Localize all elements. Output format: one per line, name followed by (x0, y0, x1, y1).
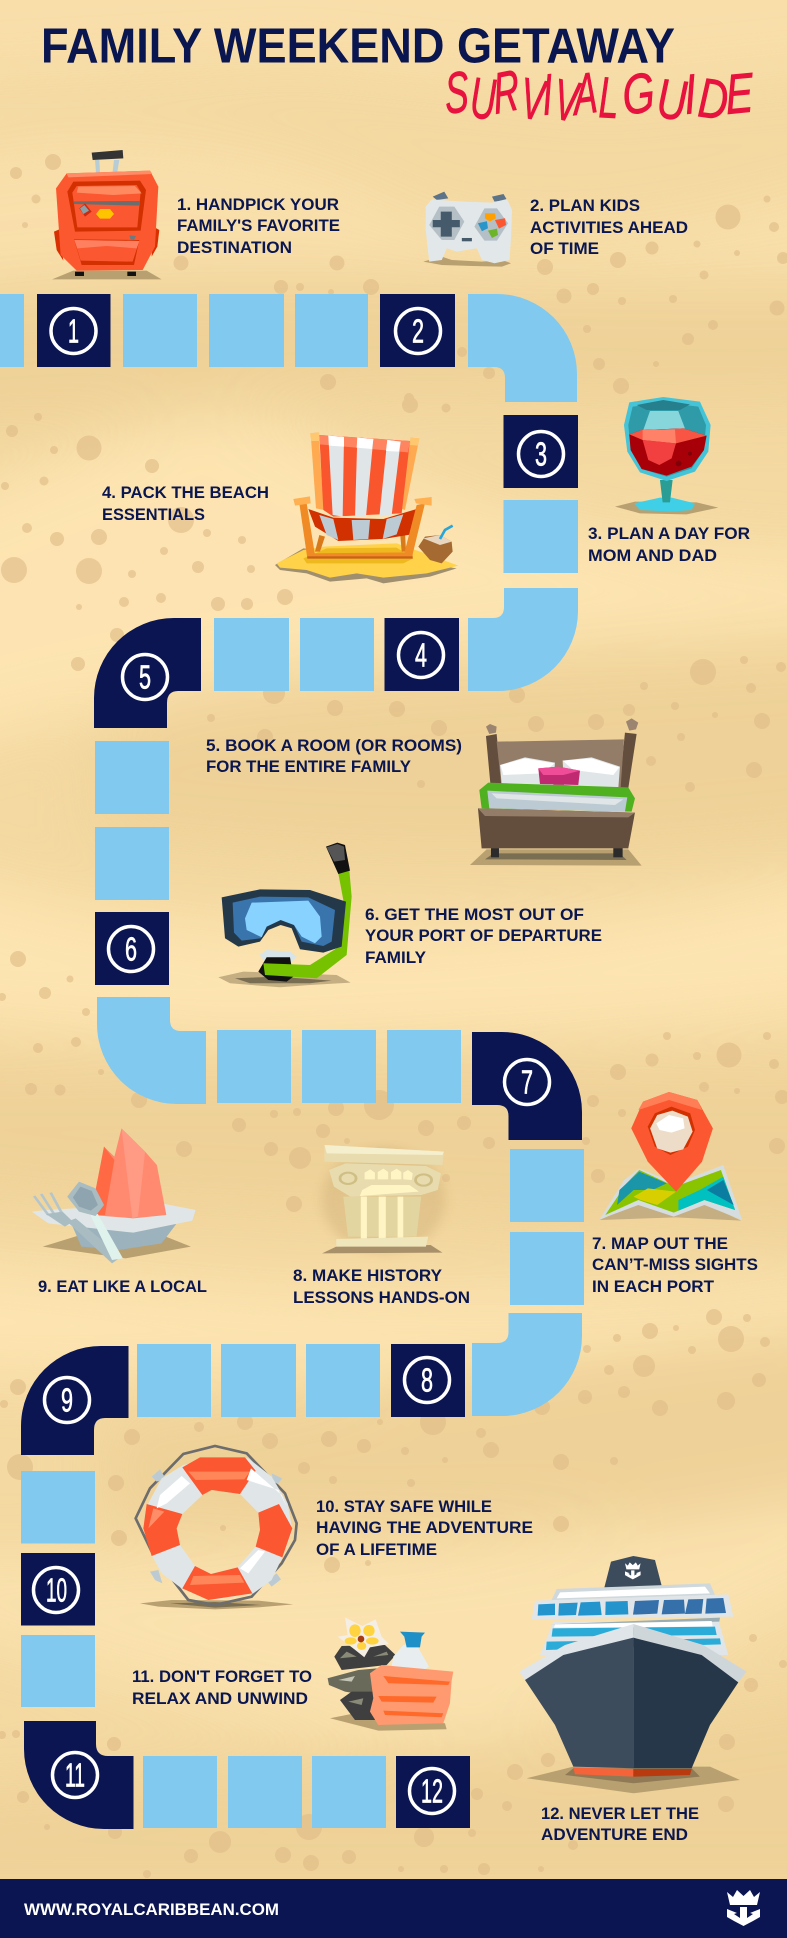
icon: snorkel mask (218, 843, 352, 987)
step 5 text (206, 736, 462, 776)
icon: food plate with cutlery (32, 1128, 196, 1263)
step 2 text: 2. PLAN KIDS (530, 196, 640, 215)
icon: cruise ship (519, 1556, 747, 1793)
step 4 text: ESSENTIALS (102, 505, 205, 524)
step 2 tile: 2 (412, 312, 424, 350)
step 1 text: 1. HANDPICK YOUR (177, 195, 339, 214)
step 8 tile (391, 1344, 465, 1417)
icon: greek column (322, 1145, 445, 1253)
step 7 corner tile: 7 (521, 1064, 533, 1100)
step 4 tile: 4 (415, 636, 427, 674)
corner tile (468, 294, 577, 402)
path tile (510, 1149, 584, 1222)
step 12 text: 12. NEVER LET THE (541, 1804, 699, 1823)
path tile (302, 1030, 376, 1103)
icon: spa stones and towels (328, 1617, 453, 1731)
corner tile (97, 997, 206, 1104)
icon: life ring (136, 1446, 297, 1609)
step 8 tile: 8 (421, 1362, 433, 1398)
step 11 text (132, 1667, 312, 1708)
step 4 text: 4. PACK THE BEACH (102, 483, 269, 502)
step 2 text (530, 196, 688, 258)
path tile (504, 500, 578, 573)
step 12 tile (396, 1756, 470, 1828)
step 2 tile (380, 294, 455, 367)
subtitle: survival guide (441, 59, 755, 134)
step 4 text (102, 483, 269, 524)
step 1 text: FAMILY'S FAVORITE (177, 216, 340, 235)
step 7 text: IN EACH PORT (592, 1277, 715, 1296)
step 10 tile (21, 1553, 95, 1626)
path tile (387, 1030, 461, 1103)
step 10 tile: 10 (46, 1572, 67, 1608)
path tile (312, 1756, 386, 1828)
step 8 text: 8. MAKE HISTORY (293, 1266, 443, 1285)
corner tile (472, 1313, 582, 1416)
path tile (221, 1344, 296, 1417)
game board path (0, 294, 584, 1829)
step 8 text: LESSONS HANDS-ON (293, 1288, 470, 1307)
step 9 text: 9. EAT LIKE A LOCAL (38, 1277, 207, 1296)
step 6 text: 6. GET THE MOST OUT OF (365, 905, 584, 924)
step 5 text: 5. BOOK A ROOM (OR ROOMS) (206, 736, 462, 755)
path tile (143, 1756, 217, 1828)
path tile (123, 294, 197, 367)
path tile (0, 294, 24, 367)
step 3 tile (504, 415, 578, 488)
icon: suitcase (52, 150, 162, 279)
path tile (300, 618, 374, 691)
step 11 corner tile: 11 (65, 1756, 85, 1794)
step 2 text: OF TIME (530, 239, 599, 258)
path tile (209, 294, 284, 367)
step 8 text (293, 1266, 470, 1307)
step 6 tile (95, 912, 169, 985)
step 7 corner tile (472, 1032, 582, 1140)
step 7 text: CAN’T-MISS SIGHTS (592, 1255, 758, 1274)
path tile (21, 1635, 95, 1707)
step 1 text (177, 195, 340, 257)
step 6 text: FAMILY (365, 948, 427, 967)
step 1 tile: 1 (68, 312, 79, 350)
step 10 text: HAVING THE ADVENTURE (316, 1518, 533, 1537)
path tile (306, 1344, 380, 1417)
step 3 text (588, 524, 750, 565)
step 10 text (316, 1497, 533, 1559)
step 10 text: OF A LIFETIME (316, 1540, 437, 1559)
step 1 tile (37, 294, 110, 367)
step 4 tile (384, 618, 459, 691)
footer bar (0, 1879, 787, 1938)
step 9 corner tile (21, 1346, 128, 1455)
icon: crown and anchor logo (727, 1890, 760, 1926)
step 11 corner tile (24, 1721, 134, 1829)
icon: beach chair (275, 432, 458, 583)
step 11 text: RELAX AND UNWIND (132, 1689, 308, 1708)
title: FAMILY WEEKEND GETAWAY (41, 20, 675, 74)
icon: bed (470, 718, 642, 866)
path tile (21, 1471, 95, 1544)
step 12 tile: 12 (421, 1772, 443, 1810)
path tile (214, 618, 289, 691)
step 1 text: DESTINATION (177, 238, 292, 257)
step 9 corner tile: 9 (61, 1382, 73, 1418)
step 12 text: ADVENTURE END (541, 1825, 688, 1844)
step 5 corner tile: 5 (139, 658, 151, 696)
path tile (217, 1030, 291, 1103)
step 6 tile: 6 (125, 930, 137, 968)
step 5 text: FOR THE ENTIRE FAMILY (206, 757, 412, 776)
footer url: WWW.ROYALCARIBBEAN.COM (24, 1900, 279, 1919)
step 2 text: ACTIVITIES AHEAD (530, 218, 688, 237)
step 3 text: 3. PLAN A DAY FOR (588, 524, 750, 543)
step 11 text: 11. DON'T FORGET TO (132, 1667, 312, 1686)
step 3 tile: 3 (535, 436, 547, 472)
step 12 text (541, 1804, 699, 1844)
subtitle: survival guide: SURVIVAL (441, 59, 620, 134)
path tile (510, 1232, 584, 1305)
path tile (95, 827, 169, 900)
icon: wine glass (615, 397, 718, 514)
icon: map with pin (600, 1092, 742, 1221)
step 7 text (592, 1234, 758, 1296)
step 6 text (365, 905, 602, 967)
step 5 corner tile (94, 618, 201, 728)
subtitle: survival guide: GUIDE (619, 61, 755, 132)
path tile (95, 741, 169, 814)
step 10 text: 10. STAY SAFE WHILE (316, 1497, 492, 1516)
step 3 text: MOM AND DAD (588, 546, 717, 565)
path tile (228, 1756, 302, 1828)
step 6 text: YOUR PORT OF DEPARTURE (365, 926, 602, 945)
path tile (295, 294, 368, 367)
step 7 text: 7. MAP OUT THE (592, 1234, 728, 1253)
icon: game controller (423, 192, 512, 267)
path tile (137, 1344, 211, 1417)
corner tile (468, 588, 578, 691)
